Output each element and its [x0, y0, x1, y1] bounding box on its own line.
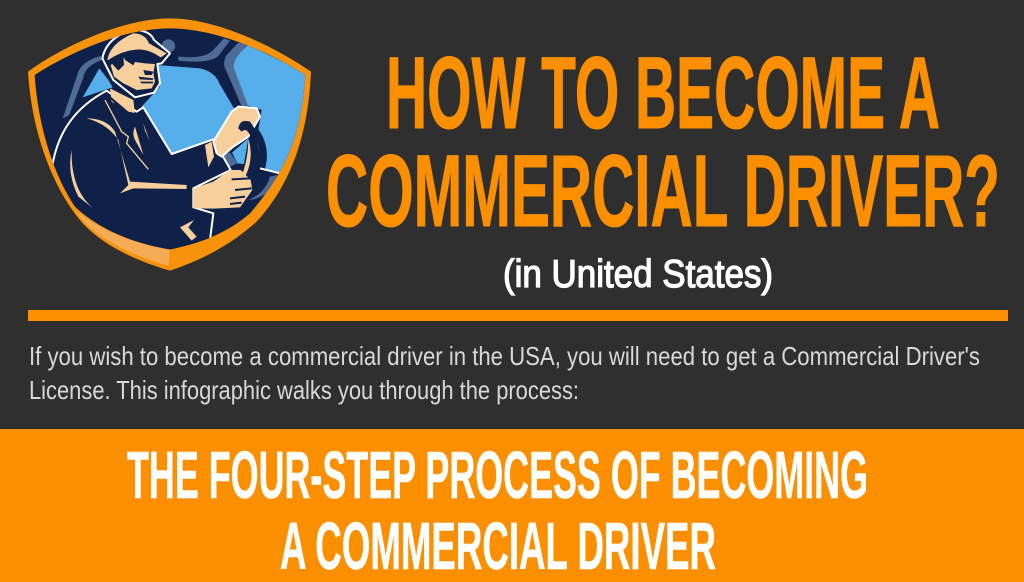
driver torso [52, 90, 232, 250]
divider bar [28, 310, 1008, 321]
lower fingers [230, 178, 252, 204]
driver face [111, 57, 155, 90]
shield rim highlight [75, 210, 170, 266]
shield outer rim [28, 18, 311, 271]
shirt collar line [105, 100, 148, 169]
intro line 2: License. This infographic walks you through the process: [29, 375, 579, 405]
icon: driver shield badge [20, 18, 311, 271]
lower hand [193, 170, 252, 209]
driver head silhouette [102, 30, 170, 97]
cab pillars [63, 38, 277, 200]
intro paragraph [29, 341, 980, 405]
jacket highlights [70, 118, 214, 241]
cab windows [83, 45, 310, 174]
dashboard line [260, 168, 283, 174]
title [326, 36, 1000, 248]
banner background [0, 429, 1024, 582]
driver neck [110, 88, 135, 115]
upper hand [213, 107, 260, 157]
upper fingers [238, 120, 254, 136]
steering wheel [256, 129, 267, 168]
driver cap [107, 33, 167, 60]
subtitle: (in United States) [503, 253, 773, 296]
shield navy interior [35, 28, 305, 249]
nose and mouth [138, 70, 153, 83]
wheel highlight [243, 138, 251, 176]
driver scene [52, 30, 306, 250]
hair and eye shadow [112, 57, 155, 71]
banner: four-step process [0, 429, 1024, 582]
collar shadow [111, 97, 135, 115]
